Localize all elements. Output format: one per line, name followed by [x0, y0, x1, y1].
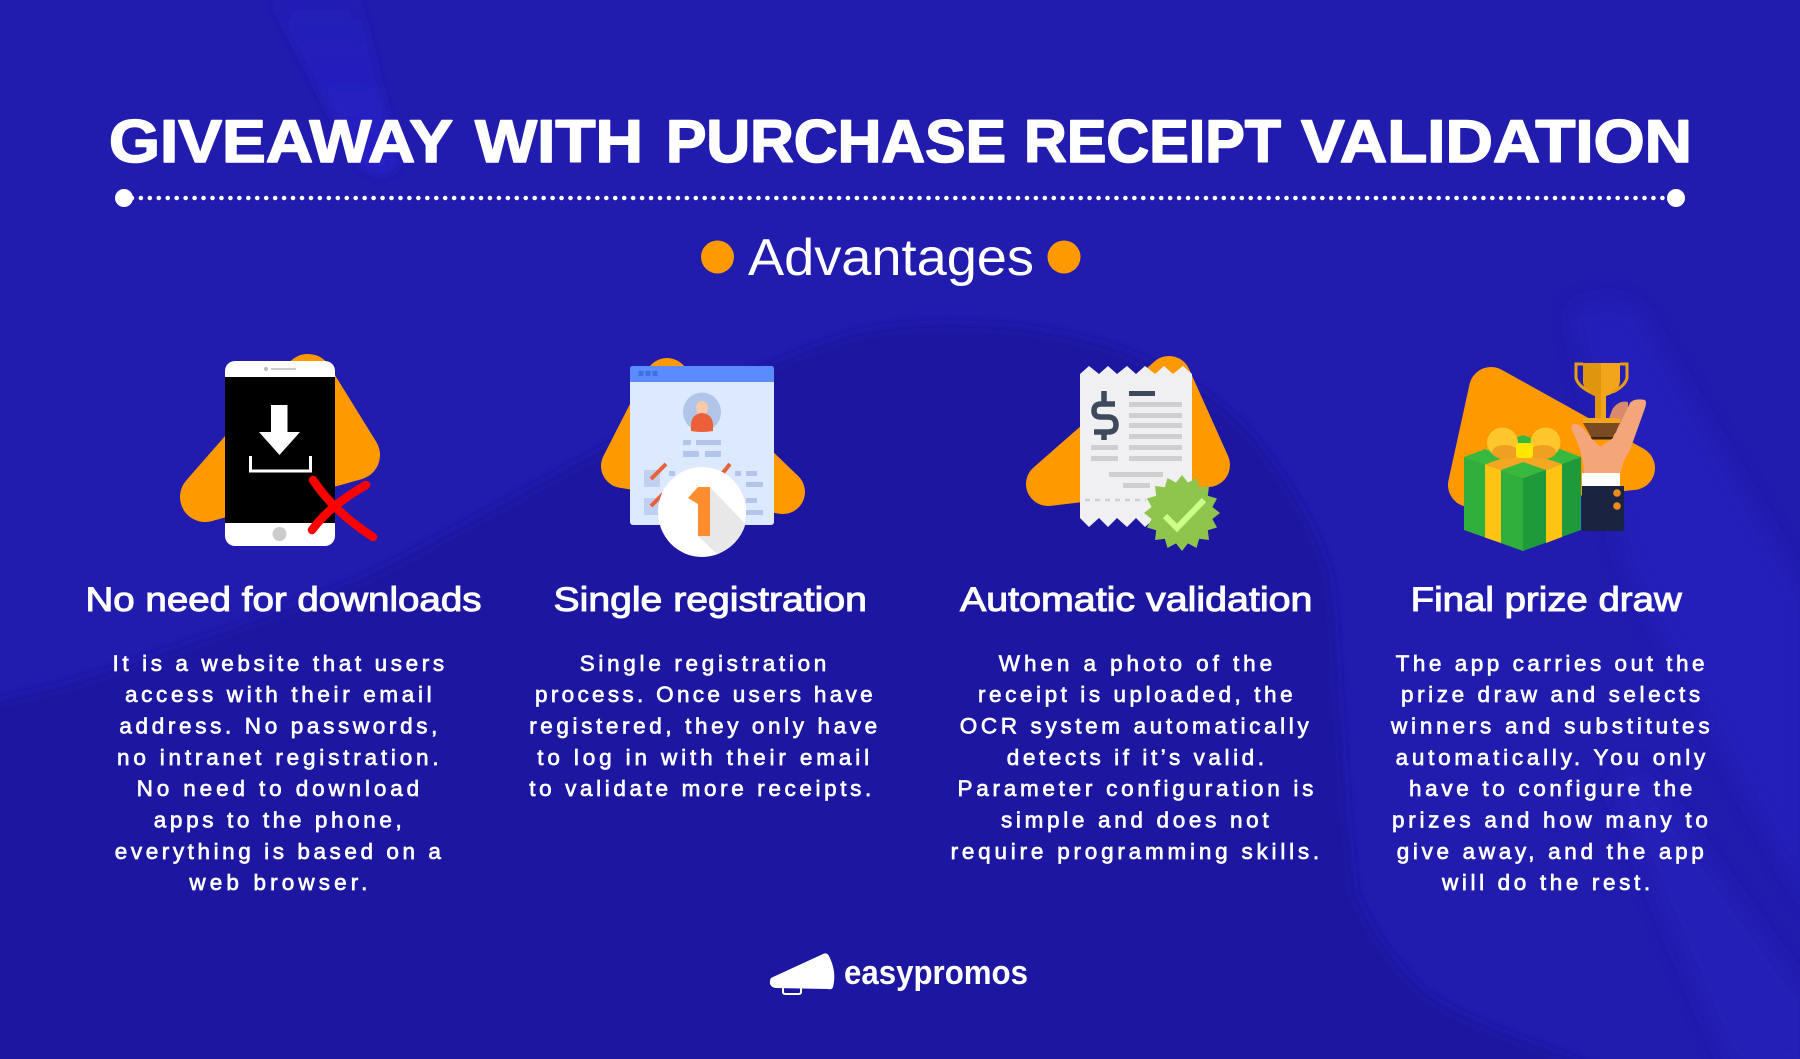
body text: to validate more receipts.	[529, 776, 871, 801]
body text: apps to the phone,	[154, 808, 402, 832]
body text: to log in with their email	[537, 745, 869, 770]
body text	[951, 651, 1319, 864]
icon: phone with download and red cross	[205, 361, 373, 546]
title: VALIDATION	[1301, 108, 1692, 175]
body text: no intranet registration.	[117, 745, 439, 770]
body text: require programming skills.	[951, 839, 1319, 864]
body text	[1390, 651, 1710, 895]
panel: single registration	[529, 366, 877, 801]
body text: registered, they only have	[529, 714, 877, 738]
body text: automatically. You only	[1396, 745, 1706, 770]
title: GIVEAWAY	[109, 108, 453, 175]
body text: process. Once users have	[535, 682, 873, 707]
body text: Single registration	[580, 651, 826, 676]
logo: easypromos	[770, 953, 1028, 994]
body text	[529, 651, 877, 801]
title: RECEIPT	[1024, 108, 1281, 175]
body text: have to configure the	[1409, 776, 1692, 801]
body text: It is a website that users	[112, 651, 444, 676]
heading: No need for downloads	[86, 581, 482, 619]
body text: OCR system automatically	[960, 714, 1309, 738]
panel: automatic validation	[951, 366, 1319, 864]
heading: Automatic validation	[960, 581, 1312, 619]
icon: registration form with number one	[623, 366, 783, 557]
body text: The app carries out the	[1396, 651, 1704, 676]
body text	[112, 651, 444, 895]
body text: Parameter configuration is	[958, 776, 1313, 801]
title: PURCHASE	[666, 108, 1006, 175]
body text: receipt is uploaded, the	[978, 682, 1293, 707]
body text: web browser.	[188, 870, 367, 895]
title: WITH	[475, 108, 643, 175]
body text: prizes and how many to	[1392, 808, 1708, 832]
body text: detects if it’s valid.	[1007, 745, 1264, 770]
body text: give away, and the app	[1397, 839, 1704, 864]
body text: will do the rest.	[1441, 870, 1650, 895]
panel: no need for downloads	[86, 361, 482, 895]
body text: access with their email	[125, 682, 432, 707]
body text: prize draw and selects	[1401, 682, 1700, 707]
panel: final prize draw	[1390, 363, 1710, 895]
subtitle: advantages: Advantages	[748, 229, 1034, 287]
heading: Single registration	[554, 581, 867, 619]
body text: winners and substitutes	[1390, 714, 1710, 738]
heading: Final prize draw	[1411, 581, 1682, 619]
body text: No need to download	[137, 776, 419, 801]
icon: gift and trophy in hand	[1464, 363, 1646, 551]
body text: When a photo of the	[999, 651, 1272, 676]
icon: receipt with check badge	[1048, 366, 1220, 551]
body text: simple and does not	[1001, 808, 1269, 832]
body text: everything is based on a	[115, 839, 441, 864]
title	[109, 108, 1692, 175]
dotted divider	[115, 189, 1685, 207]
logo: easypromos: easypromos	[844, 954, 1028, 992]
body text: address. No passwords,	[119, 714, 437, 738]
